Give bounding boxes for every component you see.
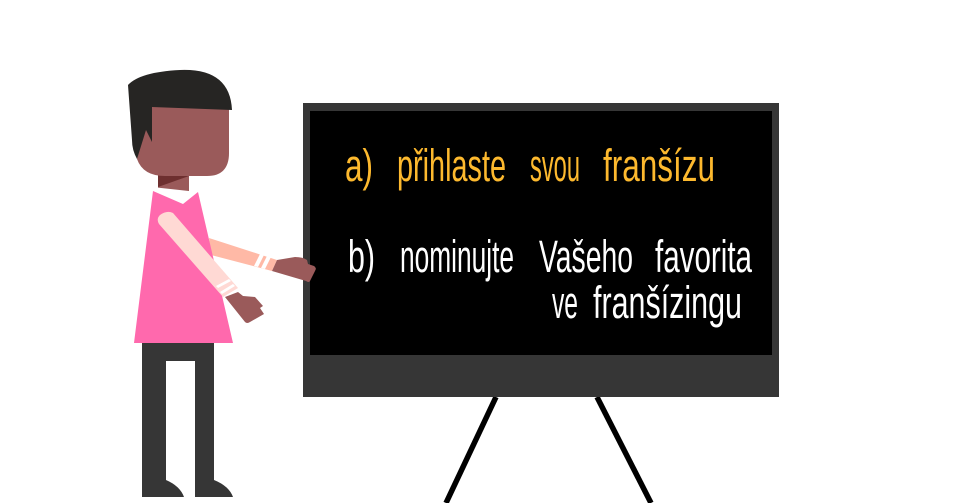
text: option a: svou (530, 140, 580, 191)
pointing hand (272, 257, 316, 282)
hair (128, 70, 232, 159)
figure: presenter (128, 70, 316, 497)
front arm (158, 212, 238, 297)
text: option b: favorita (655, 231, 753, 282)
text: option a (345, 140, 715, 191)
text: option a: franšízu (603, 140, 715, 191)
text: option b: franšízingu (593, 277, 742, 328)
face (137, 100, 229, 176)
text: option a: a) (345, 140, 373, 191)
neck (158, 174, 189, 192)
dress (134, 191, 233, 343)
collar (152, 187, 198, 205)
text: option b: ve (552, 277, 578, 328)
text: option b: Vašeho (539, 231, 633, 282)
text: option b (348, 231, 753, 328)
text: option b: nominujte (400, 231, 514, 282)
easel legs (446, 397, 651, 503)
legs and shoes (142, 343, 233, 497)
text: option a: přihlaste (397, 140, 506, 191)
lower hand (225, 292, 264, 323)
back arm (209, 238, 277, 271)
text: option b: b) (348, 231, 375, 282)
blackboard (303, 103, 779, 397)
